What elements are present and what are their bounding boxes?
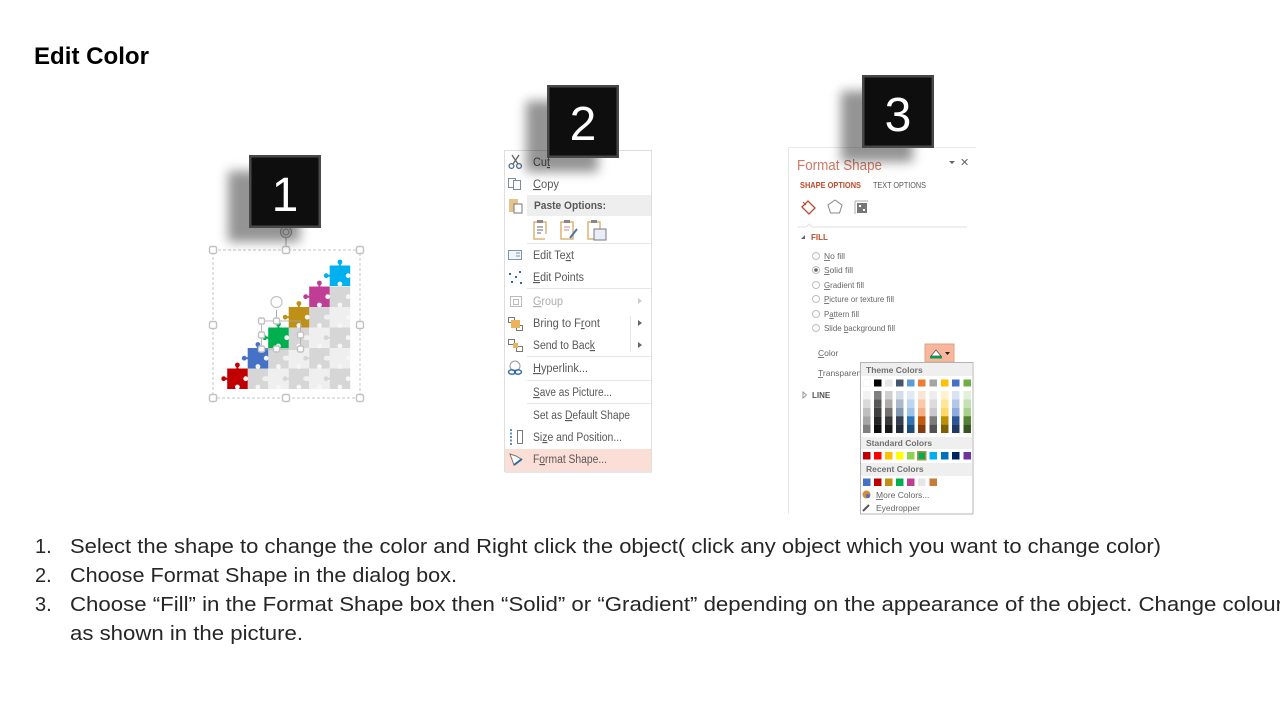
title: Edit Color [34,43,149,70]
pane controls [949,157,969,169]
menu labels: Edit Points [533,272,584,284]
step badge 2 [526,85,619,172]
badge number: 2 [570,98,596,151]
menu labels: Cut [533,157,551,169]
menu labels: Send to Back [533,340,595,352]
line section heading: LINE [812,391,831,400]
icon: copy [508,178,520,190]
palette headings [866,365,932,474]
colour palette [860,362,973,514]
pane background [788,147,976,514]
standard colours row [863,451,971,460]
fill section heading: FILL [811,233,828,242]
icon: edit points [509,271,522,284]
badge square [547,85,619,158]
fill radio options: Pattern fill [824,309,859,319]
icon: send to back [508,340,522,352]
coloured puzzle pieces [221,260,351,389]
instruction list: 3. [35,594,52,616]
badge shadow [526,101,598,172]
icon: paste [509,199,522,213]
menu labels: Save as Picture... [533,387,612,399]
menu labels: Hyperlink... [533,363,588,375]
green piece selection handles [258,296,304,352]
menu labels: Size and Position... [533,432,622,444]
panel: step 2 context menu [504,150,652,473]
icon: submenu arrows [638,298,642,348]
recent colours row [863,478,937,486]
panel: step 3 format shape pane [788,147,976,514]
grey puzzle pieces [242,281,351,389]
icon: format shape [510,454,522,465]
pane rule [797,224,967,227]
pane tabs: SHAPE OPTIONS [800,180,861,190]
fill radio options [812,251,895,333]
instruction list: Choose “Fill” in the Format Shape box then “Solid” or “Gradient” depending on the appearance of the object. Change colour [70,594,1280,616]
palette commands: Eyedropper [876,503,920,513]
step badge 3 [841,75,934,162]
selection handles [210,246,364,402]
icon: bring to front [508,318,522,330]
instruction list: as shown in the picture. [70,623,303,645]
icon: cut [509,155,521,168]
theme colours row [863,380,971,386]
step badge 1 [228,155,321,242]
menu labels: Copy [533,179,559,191]
instruction list: Choose Format Shape in the dialog box. [70,565,457,587]
selection frame [213,250,360,398]
panel: step 1 puzzle selection [210,226,364,402]
icon: pentagon [828,200,842,213]
menu labels: Format Shape... [533,454,607,466]
icon: edit text [508,250,522,260]
pane heading: Format Shape [797,158,882,174]
menu labels [533,157,630,466]
badge number: 3 [885,89,911,142]
pane tabs: TEXT OPTIONS [873,180,926,190]
line section heading [803,391,831,400]
palette headings: Theme Colors [866,365,923,375]
icon: size properties [855,201,868,214]
menu labels: Edit Text [533,250,575,262]
theme colour tints [863,391,971,433]
fill radio options: Gradient fill [824,280,864,290]
menu labels: Group [533,296,563,308]
menu background [504,150,652,472]
icon: group [510,296,522,306]
menu labels: Bring to Front [533,318,601,330]
instruction list: Select the shape to change the color and Right click the object( click any object which you want to change color) [70,536,1161,558]
palette headings: Standard Colors [866,438,932,448]
fill radio options: Solid fill [824,265,853,275]
pane controls: ✕ [960,157,969,169]
pane tabs [800,180,926,190]
badge shadow [841,91,913,162]
palette headings: Recent Colors [866,464,924,474]
badge number: 1 [272,169,298,222]
colour option row: Color [818,348,838,358]
palette commands [862,490,929,513]
menu labels: Paste Options: [534,200,606,212]
menu labels: Set as Default Shape [533,410,630,422]
icon: fill bucket [802,201,815,214]
instruction list: 1. [35,536,52,558]
format shape highlight [505,449,651,471]
fill radio options: Picture or texture fill [824,294,894,304]
icon: size and position [511,429,522,445]
fill section heading [801,233,828,242]
icon: paste option buttons [534,220,606,240]
badge square [249,155,321,228]
colour option row: Transparenc [818,368,866,378]
fill radio options: No fill [824,251,845,261]
palette commands: More Colors... [876,490,929,500]
palette section bars [861,363,972,476]
instruction list: 2. [35,565,52,587]
colour option row [818,344,954,378]
paste options highlight [527,195,651,216]
icon: rotation handle [280,226,292,250]
instruction list [35,536,1280,645]
fill radio options: Slide background fill [824,323,895,333]
menu separators [527,244,651,404]
icon: hyperlink [508,361,522,374]
badge shadow [228,171,300,242]
badge square [862,75,934,148]
